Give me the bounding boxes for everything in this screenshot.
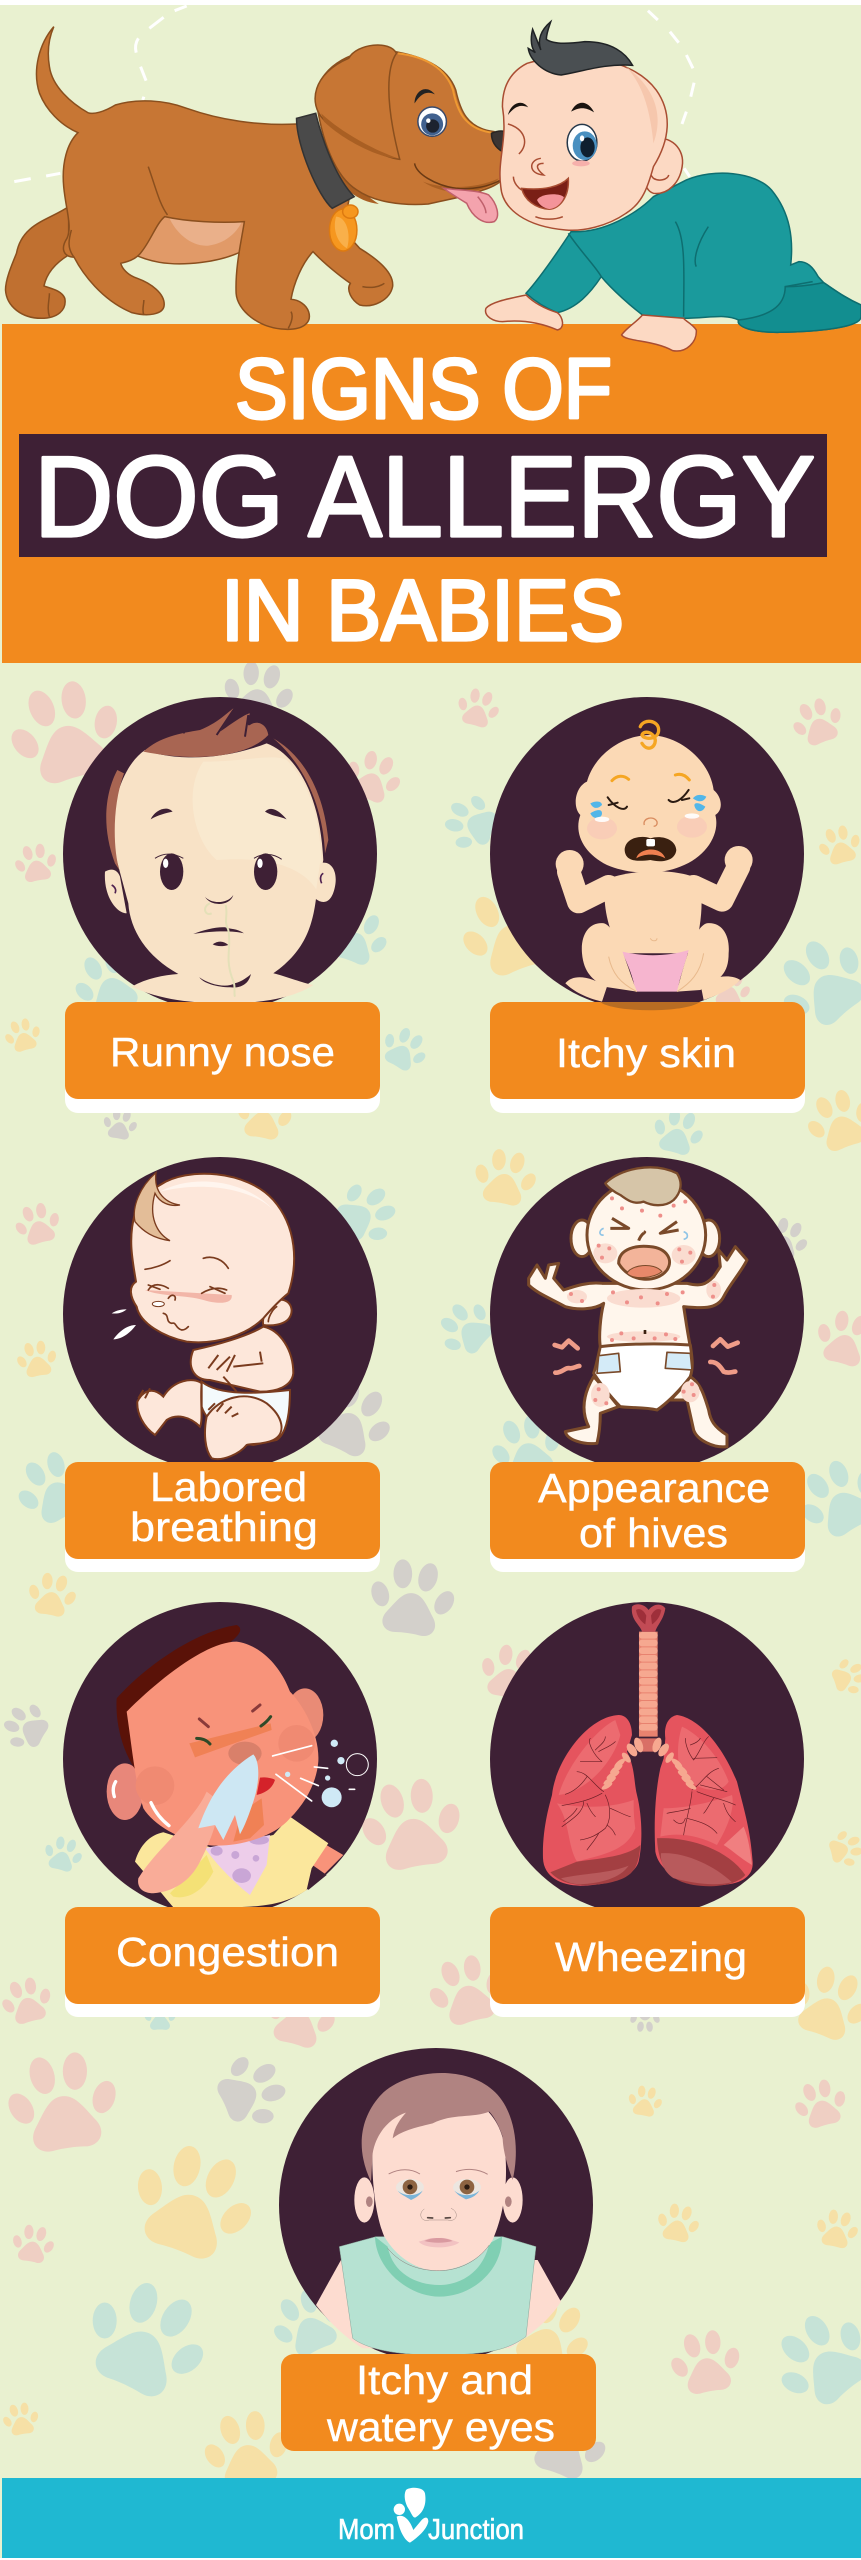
logo: momjunction <box>338 2488 524 2546</box>
label: runny nose: Runny nose <box>110 1029 335 1075</box>
label: wheezing <box>490 1907 805 2017</box>
logo: momjunction: Junction <box>428 2514 524 2546</box>
icon: baby with watery eyes <box>316 2073 561 2355</box>
panel: runny nose <box>63 697 380 1113</box>
panel: itchy skin <box>490 697 805 1113</box>
icon: baby with runny nose <box>105 708 336 1003</box>
label: labored breathing: Labored <box>150 1464 307 1510</box>
label: labored breathing: breathing <box>130 1504 318 1550</box>
label: itchy and watery eyes: watery eyes <box>326 2404 555 2450</box>
icon: baby with hives <box>529 1167 747 1447</box>
title line: signs of: SIGNS OF <box>235 342 612 437</box>
label: appearance of hives: of hives <box>579 1510 728 1556</box>
logo: momjunction: Mom <box>338 2514 395 2546</box>
label: appearance of hives <box>490 1462 805 1572</box>
label: runny nose <box>65 1002 380 1113</box>
label: labored breathing <box>65 1462 380 1572</box>
hero illustration: dog licking baby <box>5 6 861 351</box>
title line: in babies: IN BABIES <box>221 563 624 659</box>
icon: crying baby scratching <box>556 721 753 1002</box>
panel: appearance of hives <box>490 1157 805 1572</box>
title highlight bar: DOG ALLERGY <box>34 434 815 561</box>
panel: wheezing <box>490 1602 805 2017</box>
icon: child blowing nose <box>107 1625 368 1907</box>
footer bar <box>2 2478 861 2558</box>
panel: congestion <box>63 1602 380 2017</box>
label: wheezing: Wheezing <box>555 1934 747 1980</box>
baby <box>486 22 861 351</box>
icon: mother and baby heart <box>394 2488 428 2543</box>
label: appearance of hives: Appearance <box>538 1465 770 1511</box>
panel: labored breathing <box>63 1157 380 1572</box>
dog <box>5 27 514 329</box>
label: itchy skin <box>490 1002 805 1113</box>
title banner <box>2 324 861 663</box>
panel: itchy and watery eyes <box>279 2048 596 2451</box>
label: congestion <box>65 1907 380 2017</box>
label: congestion: Congestion <box>116 1929 339 1975</box>
icon: baby struggling to breathe <box>112 1173 294 1459</box>
label: itchy and watery eyes: Itchy and <box>356 2357 533 2403</box>
label: itchy skin: Itchy skin <box>556 1030 736 1076</box>
icon: lungs and trachea <box>543 1604 753 1886</box>
label: itchy and watery eyes <box>281 2354 596 2451</box>
